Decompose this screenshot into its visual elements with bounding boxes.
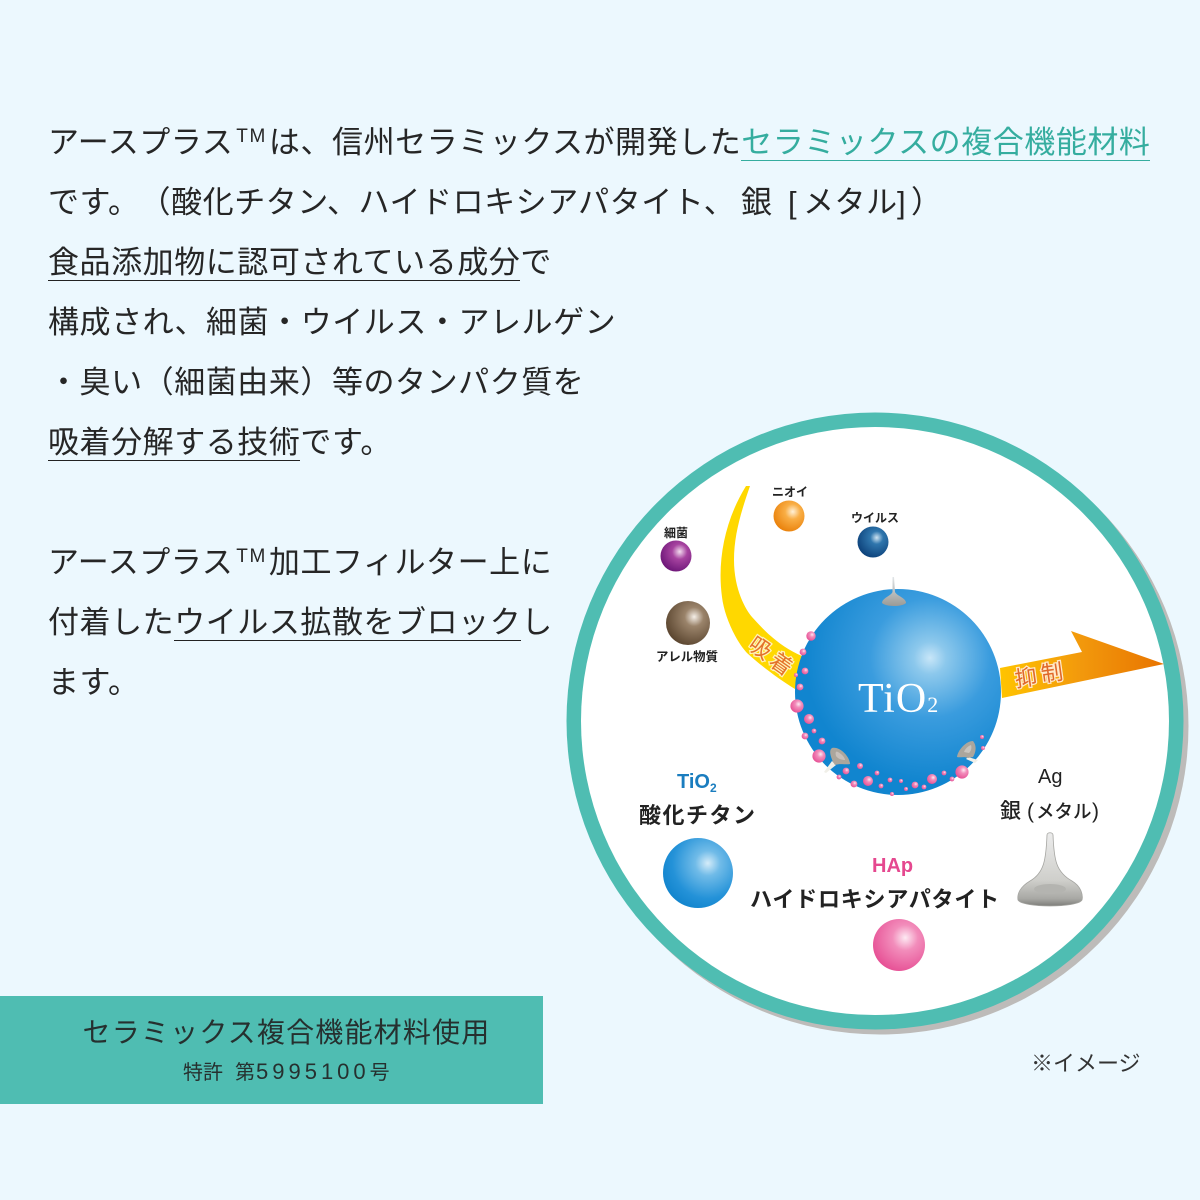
- text block: description: 銀: [741, 185, 773, 220]
- sphere: odor: [772, 485, 808, 532]
- arrow: yellow adsorption swoosh: [721, 486, 802, 689]
- pink HAp particles: [790, 631, 985, 796]
- legend: titanium oxide: TiO: [677, 771, 710, 793]
- text block: virus blocking: ます。: [48, 665, 140, 700]
- arrow: orange suppression: 制: [1039, 659, 1065, 687]
- arrow: orange suppression: [1000, 631, 1164, 698]
- text block: description: アースプラスTMは、信州セラミックスが開発したセラミックスの複合機能材料: [48, 125, 1150, 160]
- legend: silver: (: [1027, 800, 1034, 823]
- banner: ceramic composite material patent: セラミックス複合機能材料使用: [83, 1017, 490, 1048]
- text block: description: メタル: [803, 185, 898, 220]
- legend: titanium oxide: 酸化チタン: [639, 803, 757, 828]
- banner: ceramic composite material patent: 特許 第5995100号: [183, 1059, 390, 1084]
- text block: description: [48, 125, 1150, 461]
- arrow: yellow adsorption swoosh: 吸: [744, 631, 776, 665]
- legend: silver: メタル: [1036, 801, 1092, 822]
- text block: description: 吸着分解する技術です。: [48, 425, 392, 460]
- text block: virus blocking: 付着したウイルス拡散をブロックし: [48, 605, 553, 640]
- text block: description: 構成され、細菌・ウイルス・アレルゲン: [48, 305, 616, 340]
- text block: virus blocking: アースプラスTM加工フィルター上に: [48, 545, 552, 580]
- legend: titanium oxide: [639, 771, 757, 908]
- text block: virus blocking: [48, 545, 553, 700]
- legend: silver: ): [1092, 800, 1099, 823]
- circle frame: [566, 412, 1188, 1034]
- sphere: virus: [851, 511, 899, 558]
- sphere: TiO2: TiO2: [858, 676, 939, 722]
- banner: ceramic composite material patent: [0, 996, 543, 1104]
- text block: description: 食品添加物に認可されている成分で: [48, 245, 552, 280]
- sphere: allergen: [656, 601, 718, 664]
- arrow: yellow adsorption swoosh: 着: [765, 647, 797, 681]
- legend: hydroxyapatite: HAp: [872, 855, 913, 877]
- legend: titanium oxide: 2: [710, 781, 717, 795]
- sphere: odor: ニオイ: [772, 485, 808, 499]
- text block: description: です。（酸化チタン、ハイドロキシアパタイト、: [48, 185, 735, 220]
- text block: description: ）: [911, 185, 943, 220]
- legend: silver: Ag: [1038, 766, 1062, 788]
- arrow: orange suppression: 抑: [1013, 664, 1039, 692]
- sphere: TiO2: [795, 589, 1001, 795]
- legend: silver: 銀: [1000, 800, 1021, 823]
- note: image only: ※イメージ: [1031, 1051, 1141, 1076]
- legend: hydroxyapatite: [750, 855, 1000, 971]
- sphere: bacteria: [660, 525, 692, 572]
- sphere: virus: ウイルス: [851, 511, 899, 525]
- sphere: bacteria: 細菌: [664, 525, 688, 540]
- sphere: allergen: アレル物質: [656, 649, 718, 664]
- silver particles on sphere: [824, 577, 978, 773]
- legend: silver: [1000, 766, 1099, 906]
- text block: description: ]: [897, 185, 906, 220]
- text block: description: ・臭い（細菌由来）等のタンパク質を: [48, 365, 584, 400]
- legend: hydroxyapatite: ハイドロキシアパタイト: [750, 887, 1000, 912]
- text block: description: [: [788, 185, 797, 220]
